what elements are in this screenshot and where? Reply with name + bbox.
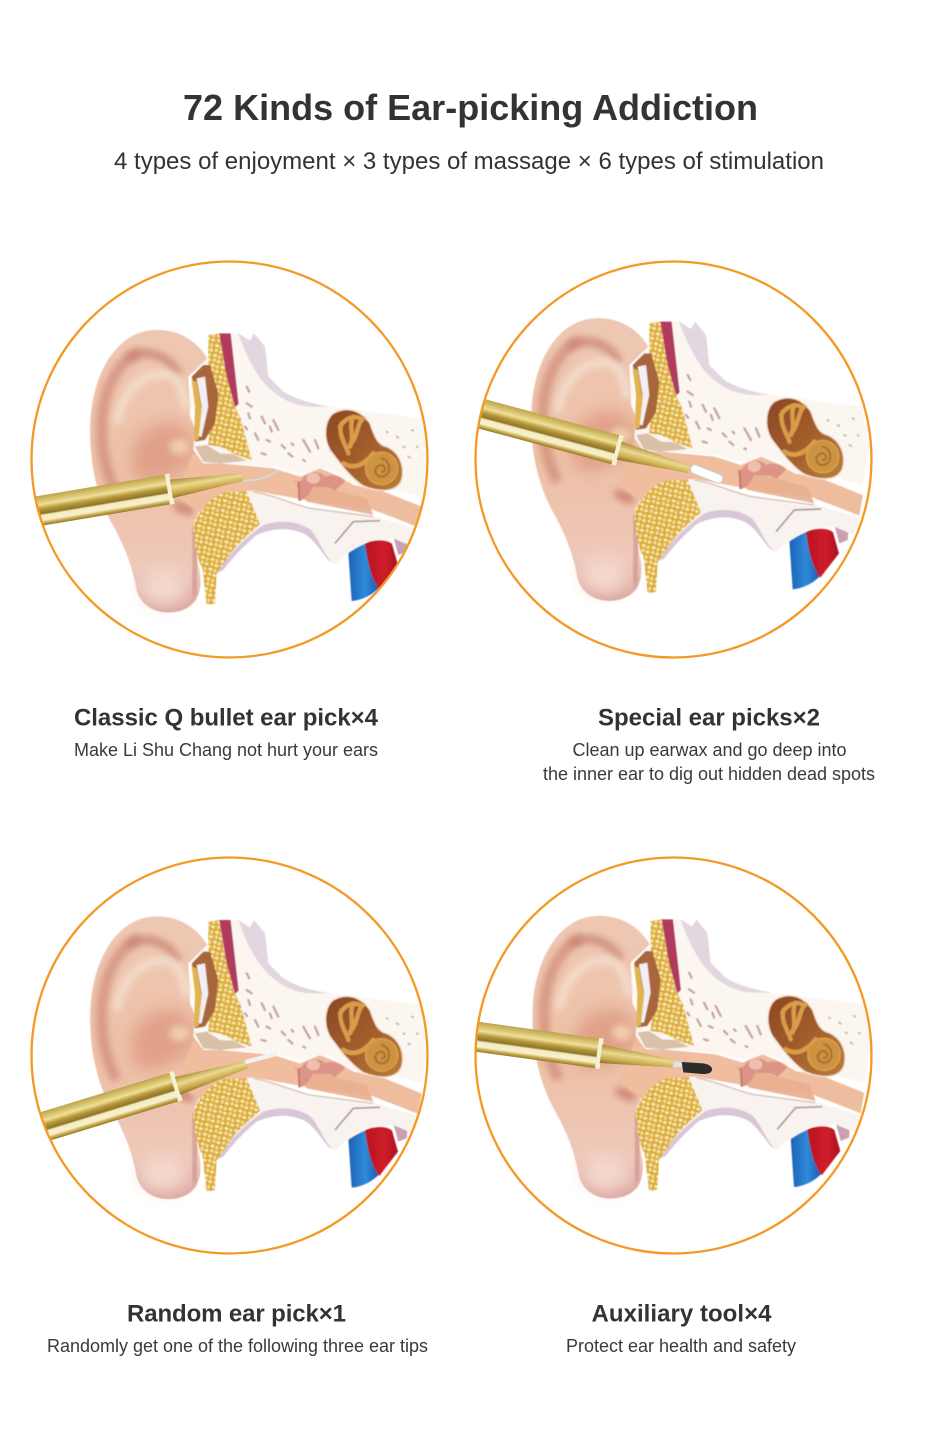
orange circle ring [475,261,871,657]
orange circle ring [475,857,871,1253]
illustration: ear cross-section with angled pick [0,857,428,1253]
caption text: Clean up earwax and go deep into [572,740,846,760]
caption text: Randomly get one of the following three ear tips [47,1336,428,1356]
ear anatomy and tool clipped to circle [476,915,870,1200]
orange circle ring [31,857,427,1253]
panel: special ear picks [474,260,874,784]
illustration: ear cross-section with bullet pick [0,261,428,657]
caption text: the inner ear to dig out hidden dead spots [543,764,875,784]
panel: random ear pick [0,857,428,1356]
illustration: ear cross-section with black tip tool [474,856,873,1255]
ear anatomy and pick clipped to circle [0,330,428,612]
orange circle ring [31,261,427,657]
panel: auxiliary tool [474,856,873,1356]
subtitle: 4 types of enjoyment × 3 types of massage × 6 types of stimulation [114,148,824,175]
caption text: Make Li Shu Chang not hurt your ears [74,740,378,760]
ear anatomy and pick clipped to circle [479,318,869,602]
caption heading: Auxiliary tool×4 [592,1300,772,1328]
panel: classic Q bullet ear pick [0,261,428,760]
illustration: ear cross-section with cotton pick [474,260,873,659]
caption heading: Special ear picks×2 [598,704,820,732]
title: 72 Kinds of Ear-picking Addiction [183,87,758,128]
caption heading: Classic Q bullet ear pick×4 [74,704,379,732]
caption heading: Random ear pick×1 [127,1300,346,1328]
caption text: Protect ear health and safety [566,1336,796,1356]
caption text [543,740,875,784]
ear anatomy and pick clipped to circle [0,917,428,1199]
